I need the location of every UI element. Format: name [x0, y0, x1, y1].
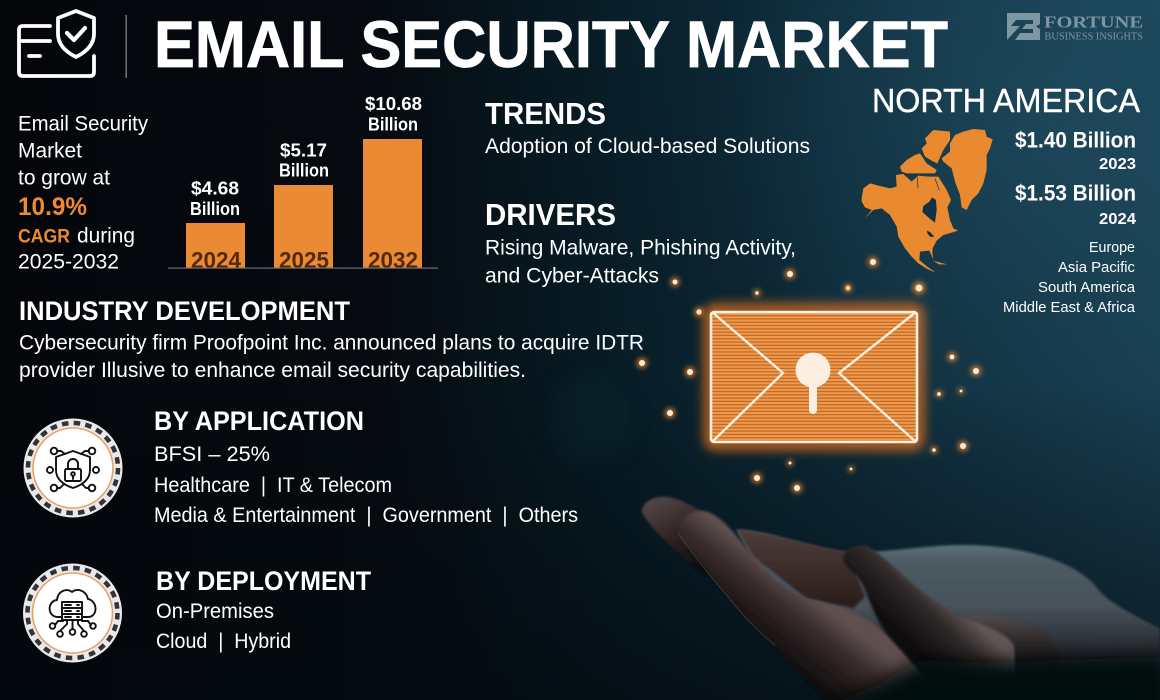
drivers: DRIVERS [485, 197, 616, 232]
industry development: provider Illusive to enhance email security capabilities. [19, 359, 526, 382]
by application [154, 406, 578, 527]
industry development [19, 296, 644, 382]
North America stats: 2024 [1099, 211, 1136, 228]
CAGR text block: during [77, 224, 135, 248]
CAGR text block: 2025-2032 [18, 250, 119, 274]
trends: Adoption of Cloud-based Solutions [485, 135, 810, 158]
other regions list: South America [1038, 280, 1136, 296]
other regions list: Asia Pacific [1058, 260, 1135, 276]
map: North America [862, 129, 993, 273]
divider [126, 15, 127, 78]
North America stats: $1.40 Billion [1015, 128, 1136, 152]
North America stats [1015, 128, 1136, 228]
heading: North America: NORTH AMERICA [872, 83, 1141, 120]
other regions list: Middle East & Africa [1003, 300, 1136, 316]
by deployment [156, 566, 371, 653]
bar 2032 [363, 94, 422, 273]
CAGR text block: Market [18, 140, 82, 162]
bar 2024: 2024 [191, 247, 241, 273]
bar 2025: $5.17 [280, 140, 327, 160]
icon: email shield [19, 11, 94, 76]
bar 2032: Billion [368, 114, 418, 134]
bar 2025: 2025 [279, 247, 329, 273]
bar 2025 [274, 140, 333, 273]
by application: BY APPLICATION [154, 406, 364, 436]
North America stats: $1.53 Billion [1015, 180, 1136, 206]
drivers: and Cyber-Attacks [485, 264, 659, 288]
CAGR text block: Email Security [18, 112, 148, 136]
CAGR text block: to grow at [18, 166, 110, 190]
logo: Fortune Business Insights [1007, 12, 1143, 42]
icon: deployment badge [23, 564, 122, 662]
bar chart: market size [168, 94, 438, 273]
by application: Healthcare | IT & Telecom [154, 474, 392, 497]
logo: Fortune Business Insights: FORTUNE [1044, 12, 1143, 32]
bar 2025: Billion [279, 160, 329, 180]
icon: application badge [24, 418, 122, 518]
trends [485, 96, 810, 158]
drivers [485, 197, 796, 288]
other regions list [1003, 240, 1136, 316]
CAGR text block [18, 112, 148, 274]
by application: Media & Entertainment | Government | Others [154, 504, 578, 527]
other regions list: Europe [1089, 240, 1135, 256]
title: EMAIL SECURITY MARKET [154, 7, 948, 81]
drivers: Rising Malware, Phishing Activity, [485, 236, 796, 260]
bar 2032: 2032 [368, 247, 418, 273]
bar 2024: $4.68 [191, 178, 239, 198]
by deployment: BY DEPLOYMENT [156, 566, 371, 596]
logo: Fortune Business Insights: BUSINESS INSIGHTS [1044, 32, 1143, 42]
industry development: Cybersecurity firm Proofpoint Inc. announced plans to acquire IDTR [19, 332, 644, 354]
by deployment: Cloud | Hybrid [156, 630, 291, 653]
by deployment: On-Premises [156, 600, 274, 623]
industry development: INDUSTRY DEVELOPMENT [19, 296, 350, 326]
North America stats: 2023 [1099, 156, 1136, 173]
CAGR text block: CAGR [18, 226, 70, 248]
bar 2032: $10.68 [365, 94, 422, 114]
bar 2024 [186, 178, 245, 273]
bar 2024: Billion [190, 199, 240, 219]
CAGR text block: 10.9% [18, 193, 87, 221]
glowing particles [637, 257, 981, 493]
by application: BFSI – 25% [154, 443, 270, 466]
hand illustration [642, 497, 1160, 700]
icon: glowing envelope with keyhole [710, 310, 918, 444]
trends: TRENDS [485, 96, 606, 131]
